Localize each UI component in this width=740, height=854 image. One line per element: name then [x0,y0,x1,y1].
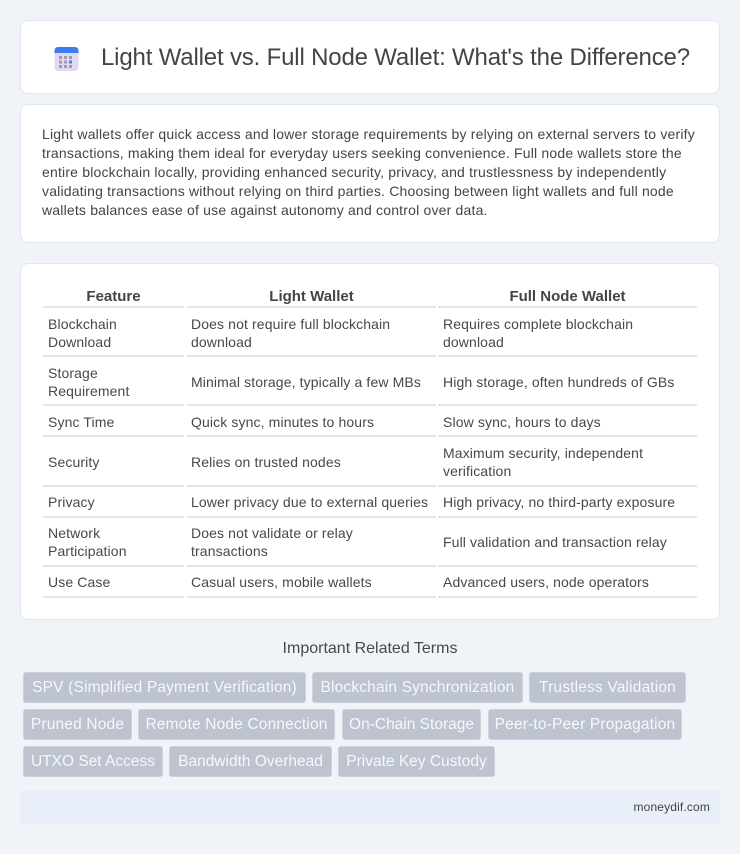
related terms heading: Important Related Terms [283,640,457,657]
row: blockchain download [48,316,117,350]
table header: full node wallet: Full Node Wallet [509,288,626,305]
comparison table panel: High storage, often hundreds of GBs [443,374,674,390]
row: network participation: Participation [48,543,127,559]
icon: calendar app [54,47,78,71]
tag [169,746,332,777]
comparison table panel: Does not require full blockchain [191,316,390,332]
comparison table panel: High privacy, no third-party exposure [443,494,675,510]
footer site name: moneydif.com [634,800,710,814]
tag: Remote Node Connection [145,716,328,733]
row: storage requirement: Requirement [48,383,129,399]
intro text [42,126,695,218]
comparison table panel: Requires complete blockchain [443,316,633,332]
intro text: wallets balances ease of use against autonomy and control over data. [42,202,488,218]
comparison table panel: Full validation and transaction relay [443,534,667,550]
tag [488,709,682,740]
row: network participation: Network [48,525,100,541]
header card [20,20,720,94]
tag [312,672,523,703]
row: use case: Use Case [48,574,110,590]
tag list [23,672,686,777]
tag: Private Key Custody [346,753,487,770]
intro text: Light wallets offer quick access and lower storage requirements by relying on external servers to verify [42,126,695,142]
comparison table panel: Advanced users, node operators [443,574,649,590]
row: network participation [48,525,127,559]
intro text: transactions, making them ideal for everyday users seeking convenience. Full node wallets store the [42,145,682,161]
comparison table panel: Quick sync, minutes to hours [191,414,374,430]
intro panel [20,104,720,243]
title: Light Wallet vs. Full Node Wallet: What's the Difference? [101,44,690,71]
row: security: Security [48,454,100,470]
tag: Pruned Node [31,716,124,733]
comparison table panel [20,263,720,620]
comparison table panel: Does not validate or relay [191,525,353,541]
tag [138,709,335,740]
tag: On-Chain Storage [349,716,474,733]
table header: feature: Feature [86,288,141,305]
comparison table panel: Casual users, mobile wallets [191,574,372,590]
row: blockchain download: Download [48,334,111,350]
tag: Peer-to-Peer Propagation [495,716,675,733]
tag [23,746,163,777]
intro text: entire blockchain locally, providing enhanced security, privacy, and trustlessness by independently [42,164,666,180]
tag: Trustless Validation [539,679,676,696]
row: privacy: Privacy [48,494,95,510]
comparison table panel: Minimal storage, typically a few MBs [191,374,421,390]
comparison table panel: Maximum security, independent [443,445,643,461]
comparison table panel: download [191,334,252,350]
comparison table panel: Relies on trusted nodes [191,454,341,470]
row: sync time: Sync Time [48,414,114,430]
row: storage requirement: Storage [48,365,98,381]
intro text: validating transactions without relying on third parties. Choosing between light wallets and full node [42,183,674,199]
comparison table panel: download [443,334,504,350]
tag: Bandwidth Overhead [178,753,323,770]
comparison table panel: Slow sync, hours to days [443,414,601,430]
comparison table panel: Lower privacy due to external queries [191,494,428,510]
tag: UTXO Set Access [31,753,155,770]
tag [23,709,132,740]
tag: Blockchain Synchronization [320,679,514,696]
footer bar [20,790,720,824]
row: blockchain download: Blockchain [48,316,117,332]
tag [23,672,306,703]
tag [342,709,481,740]
tag [338,746,495,777]
row: storage requirement [48,365,130,399]
comparison table panel: verification [443,463,511,479]
tag: SPV (Simplified Payment Verification) [32,679,297,696]
comparison table panel: transactions [191,543,268,559]
tag [529,672,686,703]
table header: light wallet: Light Wallet [269,288,354,305]
